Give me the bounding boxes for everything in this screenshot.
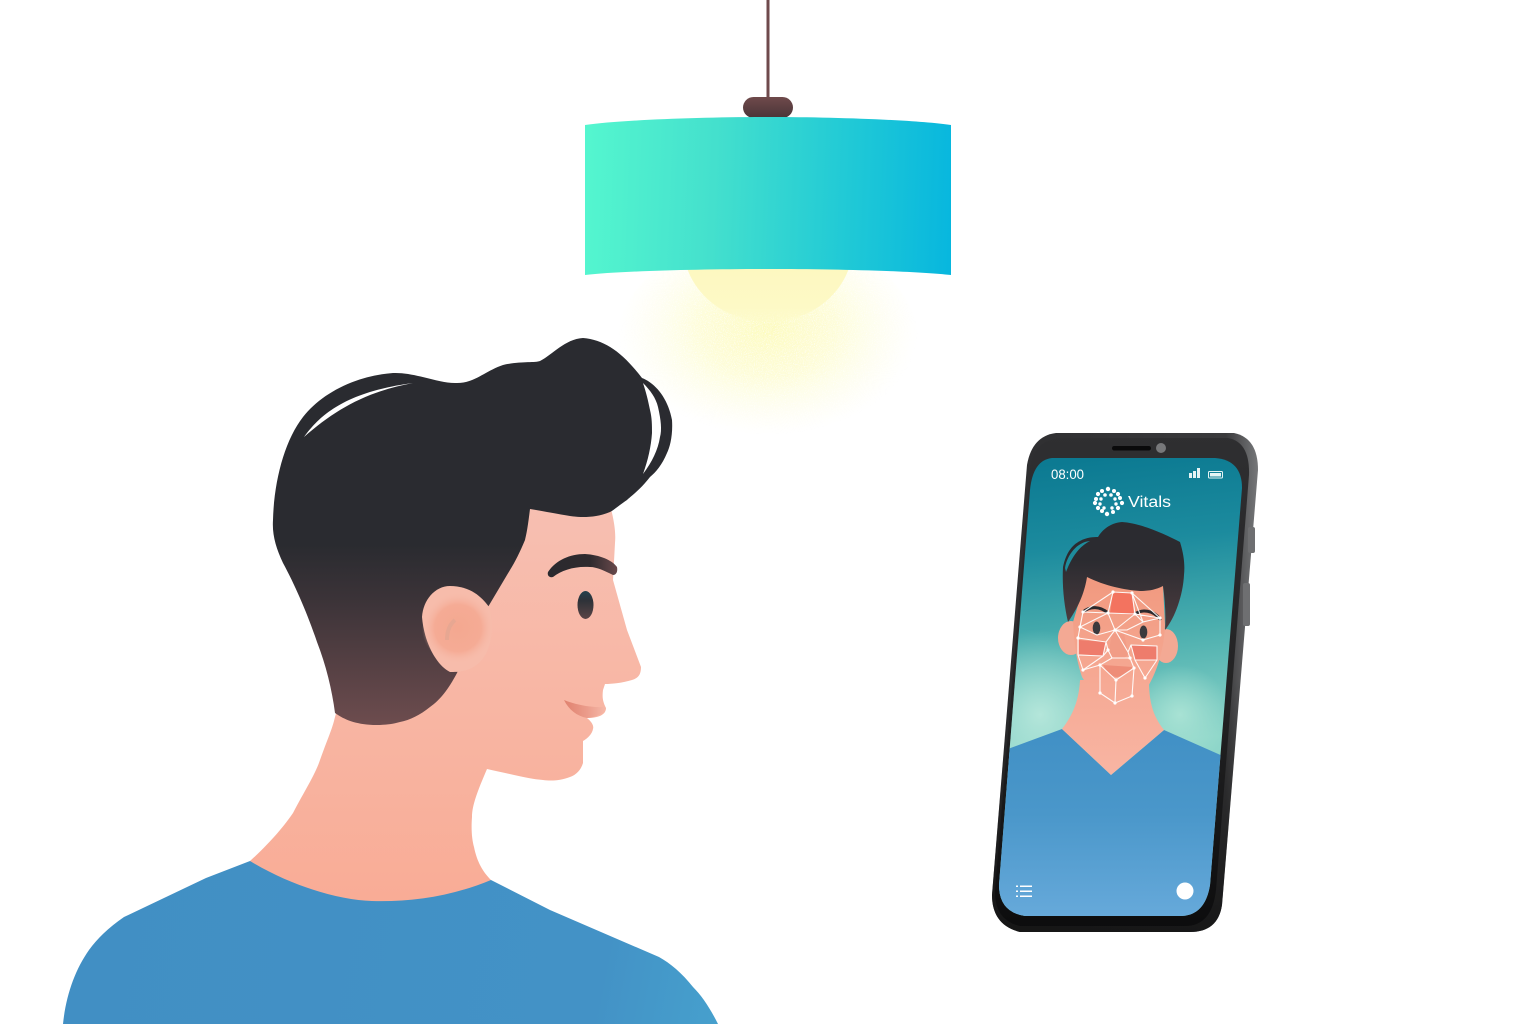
speaker [1112,446,1151,450]
side button upper [1248,527,1255,553]
screen glow left [1008,636,1084,767]
on-screen eyebrow left [1083,608,1108,613]
lamp cord [766,0,770,100]
phone body [992,433,1258,932]
Vitals logo mark [1093,487,1124,516]
on-screen eyebrow right [1135,611,1160,619]
camera [1156,443,1166,453]
left cheek scan region [1079,640,1106,656]
illustration: person scanning face with phone under a lamp [63,0,1258,1024]
on-screen shirt [990,729,1225,920]
neck and face [250,505,641,901]
screen glow right [1150,671,1220,744]
phone screen [990,450,1250,920]
ear fold [447,620,455,640]
inner ear [422,592,494,668]
battery icon [1208,472,1222,478]
on-screen hair highlight [1065,541,1090,572]
hair highlight: quiff [643,383,661,474]
person [63,338,718,1024]
light bulb [687,268,849,322]
lamp cap [743,97,793,118]
Vitals wordmark: Vitals [1128,494,1171,511]
eye [578,591,594,619]
on-screen eye left [1093,622,1100,634]
mouth [564,700,605,718]
menu icon [1016,886,1032,897]
hair highlight: top [304,383,413,437]
lamp shade [585,117,951,275]
capture button [1176,882,1194,900]
on-screen eye right [1140,626,1147,638]
phone body lower shadow [992,680,1241,932]
ear [422,586,492,672]
forehead scan region [1110,592,1134,615]
on-screen neck [1062,680,1164,775]
on-screen left ear [1058,621,1076,655]
status bar time: 08:00 [1051,467,1084,482]
on-screen nose [1110,649,1128,658]
eyebrow [548,554,617,577]
shirt [63,860,718,1024]
right cheek scan region [1132,646,1156,660]
face mesh [1076,590,1162,705]
on-screen face [1073,577,1165,684]
phone front bezel [995,438,1249,926]
hair [273,338,672,725]
on-screen mouth [1103,665,1133,677]
screen background [990,450,1250,920]
smartphone [990,433,1258,932]
signal icon [1189,468,1200,478]
on-screen hair [1063,522,1184,630]
on-screen right ear [1159,629,1178,663]
lamp [585,0,951,322]
light glow below the lamp [618,235,918,445]
side button lower [1243,583,1250,626]
